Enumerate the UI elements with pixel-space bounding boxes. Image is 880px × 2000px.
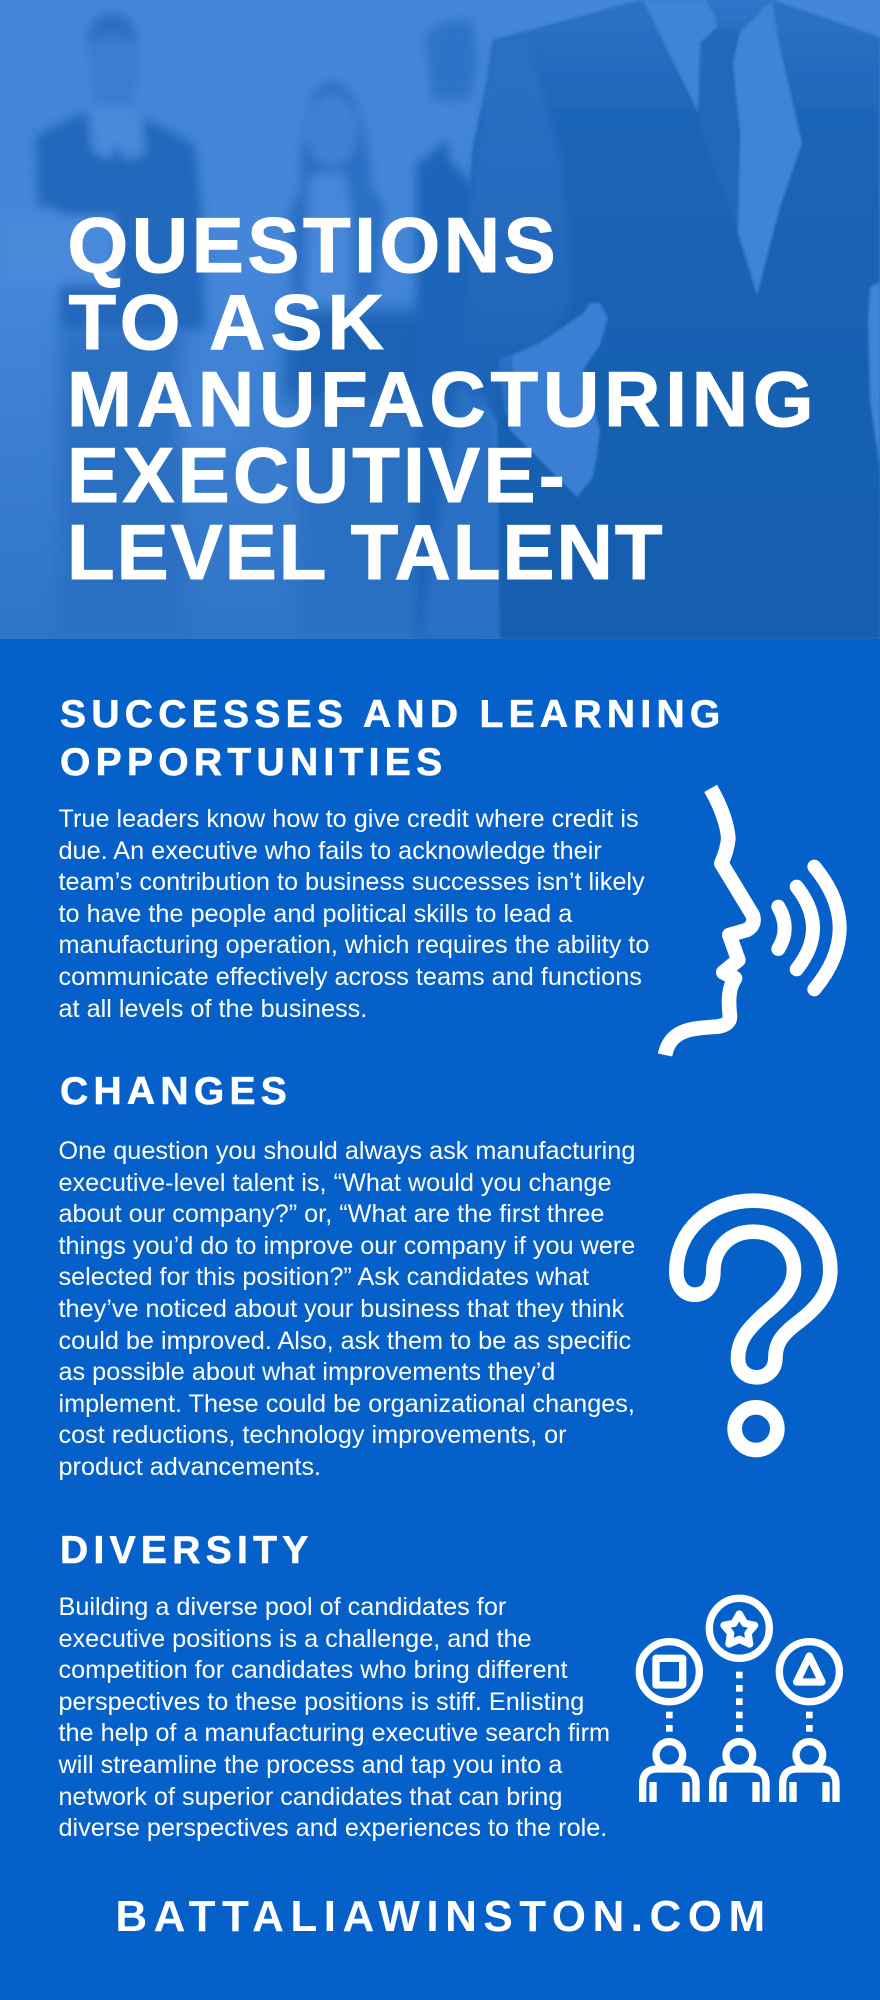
heading: successes and learning opportunities: OPPORTUNITIES (60, 741, 447, 784)
text block: changes: selected for this position?” Ask candidates what (58, 1263, 589, 1291)
title: LEVEL TALENT (67, 508, 664, 596)
text block: changes: as possible about what improvements they’d (58, 1358, 555, 1386)
right man (425, 20, 478, 100)
text block: successes: team’s contribution to business successes isn’t likely (58, 868, 645, 896)
hand (500, 303, 608, 497)
text block: successes: communicate effectively across teams and functions (58, 963, 642, 991)
text block: successes (58, 805, 649, 1023)
text block: diversity: the help of a manufacturing executive search firm (58, 1719, 610, 1747)
text block: changes: implement. These could be organizational changes, (58, 1390, 635, 1418)
text block: diversity: Building a diverse pool of candidates for (58, 1593, 506, 1621)
heading: diversity: DIVERSITY (60, 1529, 314, 1572)
lower background people (60, 330, 185, 639)
text block: diversity: diverse perspectives and experiences to the role. (58, 1814, 607, 1842)
text block: successes: at all levels of the business. (58, 995, 367, 1023)
title: EXECUTIVE- (67, 431, 568, 519)
text block: changes: product advancements. (58, 1453, 321, 1481)
text block: diversity: network of superior candidates that can bring (58, 1783, 562, 1811)
icon: speaking face (658, 784, 847, 1056)
shirt (643, 0, 717, 112)
woman (288, 82, 385, 300)
text block: changes: cost reductions, technology improvements, or (58, 1421, 567, 1449)
text block: successes: True leaders know how to give credit where credit is (58, 805, 639, 833)
title: QUESTIONS (68, 201, 559, 289)
text block: successes: to have the people and political skills to lead a (58, 900, 572, 928)
text block: successes: manufacturing operation, which requires the ability to (58, 931, 649, 959)
heading: successes and learning opportunities: SUCCESSES AND LEARNING (60, 693, 726, 736)
title (67, 201, 818, 596)
text block: changes: things you’d do to improve our company if you were (58, 1232, 635, 1260)
tie (700, 27, 740, 233)
text block: diversity: perspectives to these positions is stiff. Enlisting (58, 1688, 584, 1716)
heading: changes: CHANGES (60, 1070, 292, 1113)
text block: diversity: competition for candidates who bring different (58, 1656, 568, 1684)
sleeve (463, 37, 572, 425)
text block: changes: could be improved. Also, ask them to be as specific (58, 1327, 631, 1355)
text block: changes: executive-level talent is, “What would you change (58, 1169, 612, 1197)
text block: changes: about our company?” or, “What are the first three (58, 1200, 604, 1228)
text block: changes (58, 1137, 635, 1481)
footer website: BATTALIAWINSTON.COM (115, 1892, 772, 1941)
man in foreground (420, 380, 505, 639)
icon: question mark (669, 1193, 838, 1458)
title: MANUFACTURING (67, 354, 818, 442)
heading: successes and learning opportunities (60, 693, 726, 784)
hero photo background (0, 0, 880, 639)
text block: diversity (58, 1593, 610, 1842)
text block: successes: due. An executive who fails to acknowledge their (58, 837, 602, 865)
title: TO ASK (68, 278, 389, 366)
text block: diversity: executive positions is a challenge, and the (58, 1625, 532, 1653)
text block: diversity: will streamline the process and tap you into a (58, 1751, 562, 1779)
left man (87, 13, 140, 105)
text block: changes: they’ve noticed about your business that they think (58, 1295, 624, 1323)
icon: diverse candidates (636, 1594, 843, 1802)
text block: changes: One question you should always ask manufacturing (58, 1137, 635, 1165)
